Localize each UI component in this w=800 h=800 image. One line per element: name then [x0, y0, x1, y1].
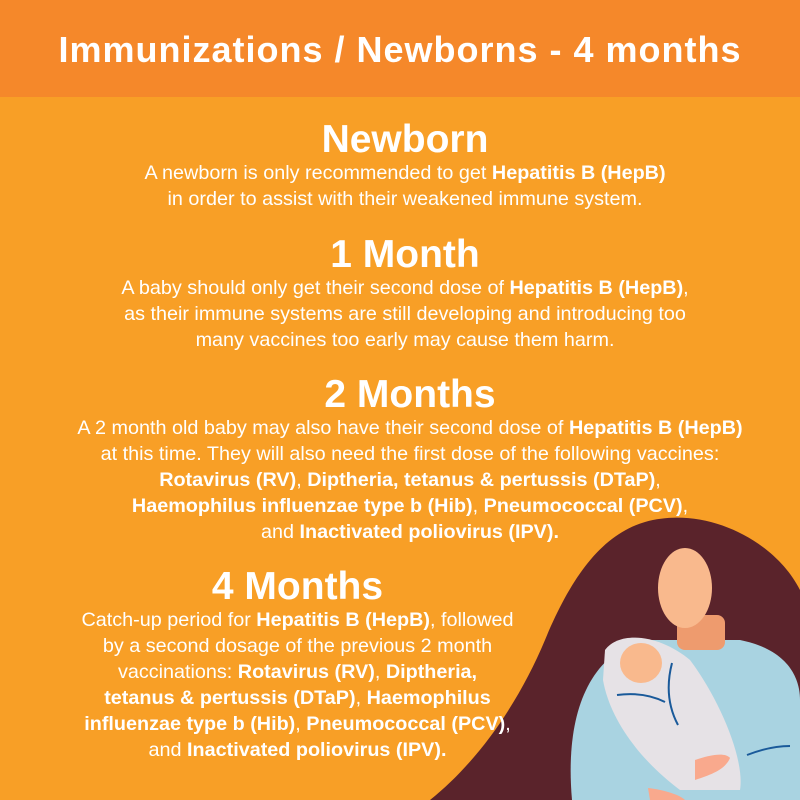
section: 1 month: 1 Month [330, 233, 480, 276]
section: 4 months: tetanus & pertussis (DTaP), Haemophilus [104, 687, 491, 709]
section: 1 month: A baby should only get their second dose of Hepatitis B (HepB), [121, 277, 689, 299]
section: 1 month: many vaccines too early may cause them harm. [196, 329, 614, 351]
hands [695, 755, 730, 780]
neck [677, 615, 725, 650]
section: 2 months [77, 373, 743, 543]
body [571, 640, 800, 800]
section: newborn: A newborn is only recommended to get Hepatitis B (HepB) [144, 162, 666, 184]
baby face [620, 643, 662, 683]
section: 4 months: by a second dosage of the previous 2 month [103, 635, 492, 657]
section: newborn: Newborn [322, 118, 488, 161]
section: 2 months: Rotavirus (RV), Diptheria, tetanus & pertussis (DTaP), [159, 469, 661, 491]
section: 4 months: influenzae type b (Hib), Pneumococcal (PCV), [84, 713, 511, 735]
section: 4 months [81, 565, 514, 761]
hair [430, 518, 800, 800]
header: Immunizations / Newborns - 4 months [58, 29, 742, 70]
section: newborn: in order to assist with their weakened immune system. [168, 188, 642, 210]
face [658, 548, 712, 628]
section: 4 months: and Inactivated poliovirus (IPV). [149, 739, 446, 761]
section: 2 months: and Inactivated poliovirus (IPV). [261, 521, 559, 543]
section: 1 month [121, 233, 689, 351]
section: 2 months: at this time. They will also need the first dose of the following vaccines: [101, 443, 719, 465]
section: 1 month: as their immune systems are still developing and introducing too [124, 303, 686, 325]
section: 2 months: A 2 month old baby may also have their second dose of Hepatitis B (HepB) [77, 417, 743, 439]
section: 4 months: vaccinations: Rotavirus (RV), Diptheria, [118, 661, 477, 683]
section: newborn [144, 118, 666, 210]
section: 4 months: Catch-up period for Hepatitis B (HepB), followed [81, 609, 514, 631]
section: 2 months: 2 Months [324, 373, 496, 416]
header [0, 0, 800, 97]
section: 4 months: 4 Months [212, 565, 383, 608]
baby blanket [603, 638, 741, 790]
section: 2 months: Haemophilus influenzae type b (Hib), Pneumococcal (PCV), [132, 495, 688, 517]
